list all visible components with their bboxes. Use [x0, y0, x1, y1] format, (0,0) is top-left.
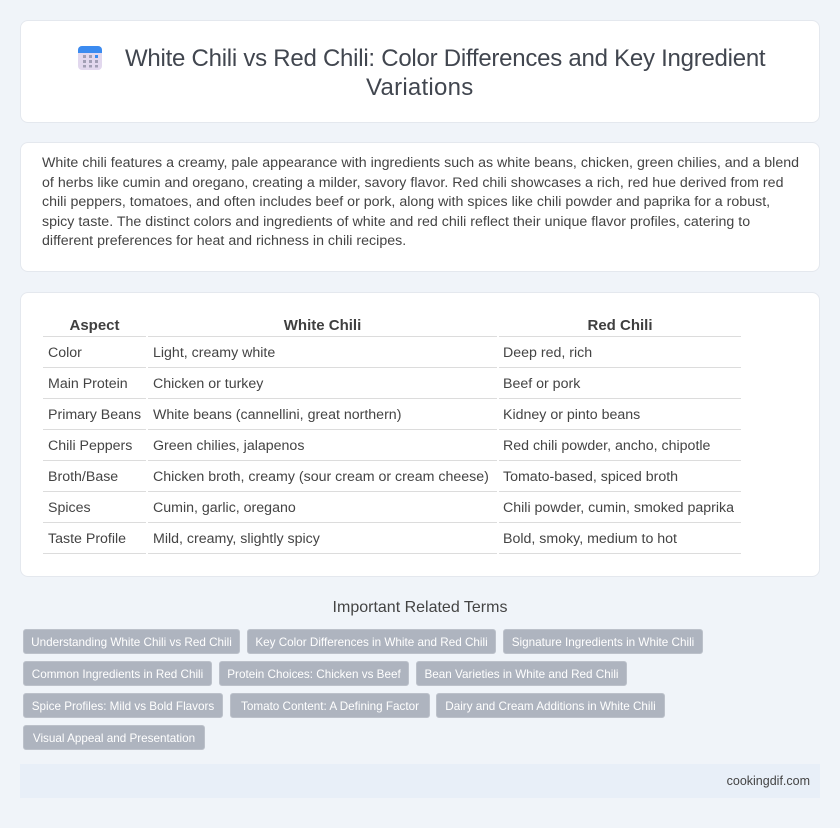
tag — [503, 629, 703, 654]
text block: summary: White chili features a creamy, pale appearance with ingredients such as white beans, chicken, green chilies, and a blend — [42, 155, 799, 171]
tag — [23, 693, 223, 718]
row: Spices: Chili powder, cumin, smoked paprika — [503, 500, 734, 516]
row: Chili Peppers: Green chilies, jalapenos — [153, 438, 304, 454]
row: Taste Profile: Taste Profile — [48, 531, 126, 547]
row: Chili Peppers: Chili Peppers — [48, 438, 132, 454]
row: Color: Light, creamy white — [153, 345, 275, 361]
row: Main Protein: Main Protein — [48, 376, 128, 392]
row: Primary Beans: Primary Beans — [48, 407, 141, 423]
row: Broth/Base: Chicken broth, creamy (sour cream or cream cheese) — [153, 469, 489, 485]
text block: summary: spicy taste. The distinct colors and ingredients of white and red chili reflect their unique flavor profiles, catering to — [42, 214, 750, 230]
tag: Spice Profiles: Mild vs Bold Flavors — [32, 700, 214, 713]
panel: header — [20, 20, 820, 123]
footer text: cookingdif.com — [727, 774, 810, 788]
row: Primary Beans — [48, 407, 640, 423]
text block: summary: chili peppers, tomatoes, and often includes beef or pork, along with spices like chili powder and paprika for a robust, — [42, 194, 770, 210]
row: Broth/Base: Broth/Base — [48, 469, 118, 485]
row: Broth/Base: Tomato-based, spiced broth — [503, 469, 678, 485]
panel: comparison table — [20, 292, 820, 577]
row: Main Protein: Chicken or turkey — [153, 376, 263, 392]
heading: related terms: Important Related Terms — [333, 599, 507, 616]
row: Primary Beans: Kidney or pinto beans — [503, 407, 640, 423]
row: Taste Profile: Bold, smoky, medium to hot — [503, 531, 677, 547]
row: Color: Color — [48, 345, 82, 361]
text block: summary: of herbs like cumin and oregano, creating a milder, savory flavor. Red chili showcases a rich, red hue derived from red — [42, 175, 783, 191]
row: Taste Profile — [48, 531, 677, 547]
column heading: Aspect: Aspect — [69, 317, 120, 334]
tag: Common Ingredients in Red Chili — [32, 668, 203, 681]
tag — [436, 693, 665, 718]
text block: summary — [42, 155, 799, 249]
row: Primary Beans: White beans (cannellini, great northern) — [153, 407, 401, 423]
tag — [247, 629, 496, 654]
tag: Protein Choices: Chicken vs Beef — [227, 668, 401, 681]
text block: summary: different preferences for heat and richness in chili recipes. — [42, 233, 406, 249]
tag: Bean Varieties in White and Red Chili — [424, 668, 619, 681]
row: Main Protein: Beef or pork — [503, 376, 580, 392]
column heading: Red Chili: Red Chili — [587, 317, 652, 334]
row: Taste Profile: Mild, creamy, slightly spicy — [153, 531, 320, 547]
row: Broth/Base — [48, 469, 678, 485]
tag — [219, 661, 409, 686]
title: Variations — [366, 74, 473, 101]
comparison table — [43, 317, 741, 554]
row: Spices — [48, 500, 734, 516]
related term tags — [23, 629, 703, 750]
tag: Key Color Differences in White and Red Chili — [255, 636, 488, 649]
row: Chili Peppers — [48, 438, 710, 454]
row: Chili Peppers: Red chili powder, ancho, chipotle — [503, 438, 710, 454]
row: Color: Deep red, rich — [503, 345, 592, 361]
row: Spices: Cumin, garlic, oregano — [153, 500, 296, 516]
row: Spices: Spices — [48, 500, 91, 516]
tag: Signature Ingredients in White Chili — [512, 636, 694, 649]
title — [125, 45, 766, 101]
row: Color — [48, 345, 592, 361]
tag — [23, 661, 212, 686]
title: White Chili vs Red Chili: Color Differences and Key Ingredient — [125, 45, 765, 72]
tag — [23, 725, 205, 750]
row: Main Protein — [48, 376, 580, 392]
tag: Dairy and Cream Additions in White Chili — [445, 700, 656, 713]
tag: Tomato Content: A Defining Factor — [241, 700, 419, 713]
icon: calendar — [78, 46, 102, 70]
tag: Understanding White Chili vs Red Chili — [31, 636, 232, 649]
column heading: White Chili: White Chili — [284, 317, 361, 334]
footer bar — [20, 764, 820, 798]
tag: Visual Appeal and Presentation — [33, 732, 195, 745]
tag — [23, 629, 240, 654]
tag — [416, 661, 627, 686]
panel: summary — [20, 142, 820, 272]
tag — [230, 693, 430, 718]
